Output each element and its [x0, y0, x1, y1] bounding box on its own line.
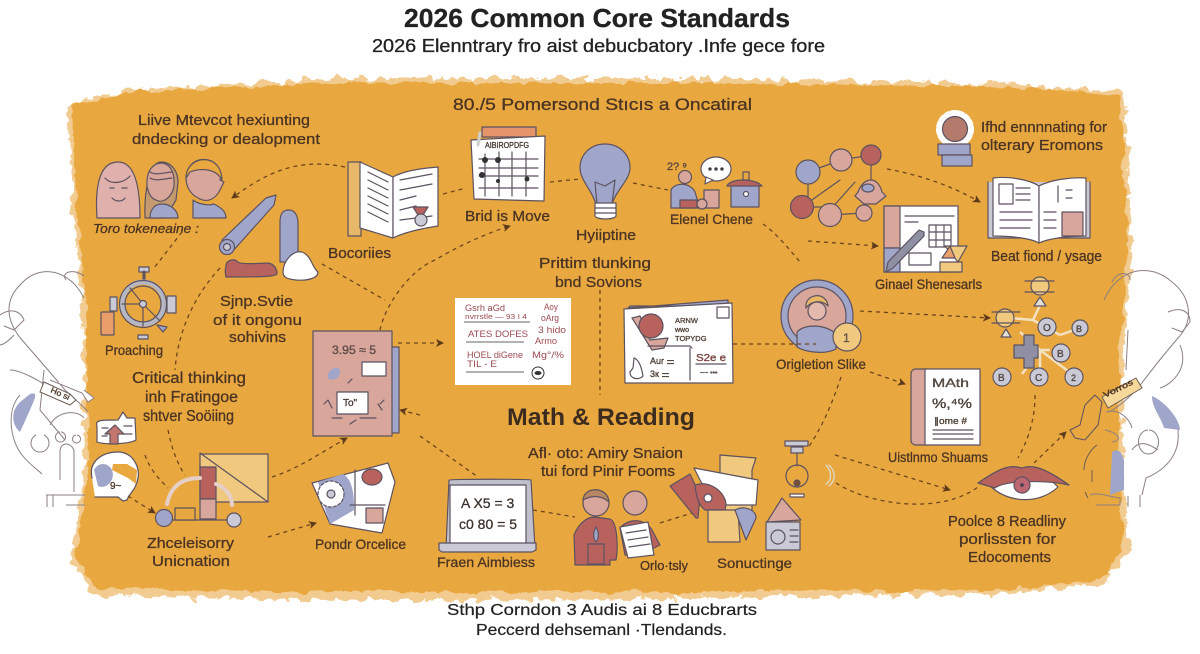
icon: open book right — [988, 177, 1090, 243]
icon: calendar — [471, 127, 545, 201]
panel: torn orange background — [68, 78, 1132, 600]
icon: math notebook — [313, 331, 399, 436]
left bust line art — [0, 272, 94, 507]
icon: laptop: c0 80 = 5 — [459, 516, 517, 532]
label: Fraen Aimbiess: Fraen Aimbiess — [437, 554, 535, 570]
panel: worksheet: Gsrh aGd — [465, 303, 505, 313]
title: 2026 Common Core Standards — [404, 3, 790, 33]
panel: card with coin: TOPYDG — [675, 334, 707, 343]
chart: tree network: 2 — [1071, 373, 1076, 383]
label: Hyiiptine: Hyiiptine — [576, 227, 636, 244]
heading: people — [132, 112, 321, 148]
panel: worksheet: Aoy — [544, 302, 558, 312]
icon: portrait — [781, 280, 861, 352]
icon: math notebook: To" — [343, 398, 358, 409]
icon: gear head and books — [938, 112, 972, 166]
panel: worksheet: Mg°/% — [532, 350, 564, 360]
label: Simple Style: of it ongonu — [213, 312, 302, 329]
label: Orlo-tsly: Orlo·tsly — [640, 559, 689, 573]
label: Critical thinking: Critical thinking — [132, 370, 246, 387]
label: Brid is Move: Brid is Move — [465, 208, 550, 225]
label: Poolce Reading: porlissten for — [959, 531, 1056, 548]
label: Critical thinking — [132, 370, 246, 425]
label: Zhceleisorry — [147, 535, 235, 570]
icon: portrait: 1 — [843, 331, 850, 345]
icon: two people reading — [574, 490, 660, 565]
icon: math book: MAth — [932, 376, 969, 390]
scroll and ribbons at right: Vorros — [1101, 377, 1135, 400]
label: Pondr Orcelice: Pondr Orcelice — [315, 536, 406, 552]
label: Uistlnmo Shuams: Uistlnmo Shuams — [888, 450, 988, 465]
panel: worksheet: 3 hido — [538, 325, 566, 335]
icon: math notebook: 3.95 ≈ 5 — [332, 343, 376, 357]
label: Simple Style — [213, 293, 302, 346]
icon: math book — [911, 369, 980, 445]
label: Zhceleisorry: Zhceleisorry — [147, 535, 235, 552]
dashed arrows — [128, 164, 1066, 537]
chart: tree network: B — [1057, 349, 1064, 360]
icon: eye — [978, 467, 1069, 500]
label: Toro: Toro tokeneaine : — [93, 221, 199, 236]
panel: card with coin: 3к ⚌ — [650, 369, 670, 379]
label: Critical thinking: shtver Soöiing — [143, 408, 234, 425]
panel: card with coin: ARNW — [675, 316, 699, 325]
footer note: Sthp Corndon 3 Audis ai 8 Educbrarts — [447, 602, 757, 619]
footer note: Peccerd dehsemanl ·Tlendands. — [476, 622, 727, 639]
label: Affordable: Afl· oto: Amiry Snaion — [528, 445, 683, 462]
chart: tree network: O — [1043, 323, 1051, 334]
panel: card with coin: ~~ ••• — [700, 370, 718, 377]
icon: worksheet with arrow — [97, 412, 136, 444]
icon: paper collage — [670, 455, 801, 550]
icon: calendar: AIBIROPDFG — [485, 141, 529, 150]
icon: three faces — [96, 160, 226, 218]
label: Zhceleisorry: Unicnation — [152, 553, 230, 570]
panel: worksheet: nvrrstle — 93 I 4 — [465, 314, 527, 321]
label: Sonuctinge: Sonuctinge — [717, 555, 792, 571]
icon: gauge — [101, 267, 176, 339]
heading: top centre: 80./5 Pomersond Stıcıs a Oncatiral — [453, 95, 752, 114]
label: Elenel Chene: Elenel Chene — [670, 211, 753, 227]
icon: pencil and robot arm — [220, 195, 318, 280]
icon: document and pencil — [884, 206, 967, 272]
icon: light bulb — [580, 144, 630, 219]
icon: hanging lamp — [785, 441, 834, 497]
panel: card with coin — [624, 300, 733, 383]
panel: worksheet — [455, 298, 571, 385]
panel: worksheet: TIL - E — [467, 359, 497, 369]
heading: people: Liive Mtevcot hexiunting — [138, 112, 310, 129]
footer note — [447, 602, 757, 639]
heading: people: dndecking or dealopment — [132, 131, 321, 148]
icon: small text scroll left — [40, 382, 76, 405]
label: Affordable — [528, 445, 683, 480]
icon: laptop: A X5 = 3 — [461, 495, 515, 511]
panel: worksheet: ATES DOFES — [468, 329, 528, 339]
label: Ginael Shenesarls: Ginael Shenesarls — [875, 276, 982, 292]
label: Prittim thinking — [539, 255, 651, 291]
icon: math book: ∥ome # — [934, 416, 967, 426]
chart: tree network: B — [1076, 324, 1082, 334]
subtitle: 2026 Elenntrary fro aist debucbatory .Infe gece fore — [372, 36, 825, 56]
label: Poolce Reading: Poolce 8 Readliny — [948, 513, 1066, 530]
chart: tree network — [992, 277, 1088, 386]
icon: puzzle head — [312, 463, 395, 533]
label: Prittim thinking: bnd Sovions — [555, 274, 642, 291]
label: Simple Style: Sjnp.Svtie — [220, 293, 293, 310]
panel: card with coin: Aur ⚌ — [650, 356, 675, 366]
panel: worksheet: HOEL diGene — [467, 350, 523, 360]
right bust line art — [1090, 270, 1190, 507]
label: Beat fiond: Beat fiond / ysage — [991, 249, 1102, 265]
icon: open book left — [348, 162, 438, 238]
panel: worksheet: oArg — [541, 313, 559, 323]
panel: top-left people — [93, 112, 321, 236]
label: Poolce Reading — [948, 513, 1066, 566]
label: Indemnating — [981, 119, 1107, 154]
icon: brain head — [91, 452, 138, 501]
label: Indemnating: Ifhd ennnnating for — [981, 119, 1107, 136]
icon: person with speech bubble: 2? ⁹ — [667, 161, 687, 173]
panel: card with coin: wwo — [674, 327, 689, 334]
icon: person with speech bubble — [667, 157, 762, 209]
label: Affordable: tui ford Pinir Fooms — [541, 463, 675, 480]
label: Proaching: Proaching — [105, 342, 163, 358]
icon: brain head: 9~ — [110, 481, 122, 492]
label: Critical thinking: inh Fratingoe — [145, 389, 238, 406]
icon: small text scroll left: Ho si — [49, 386, 71, 402]
label: Origletion Slike: Origletion Slike — [776, 356, 866, 372]
panel: worksheet: Armo — [535, 336, 557, 346]
label: Poolce Reading: Edocoments — [968, 549, 1051, 566]
label: Bocoriies: Bocoriies — [328, 245, 391, 262]
scroll and ribbons at right — [1070, 377, 1142, 498]
chart: tree network: B — [998, 373, 1005, 384]
icon: network of circles — [790, 145, 886, 226]
panel: card with coin: S2e e — [696, 353, 726, 364]
icon: math book: %,⁴% — [932, 395, 972, 411]
label: Simple Style: sohivins — [229, 329, 286, 346]
label: Prittim thinking: Prittim tlunking — [539, 255, 651, 272]
icon: laptop — [439, 479, 536, 552]
chart: tree network: C — [1035, 373, 1042, 384]
icon: compass and folder — [156, 453, 268, 527]
label: Indemnating: olterary Eromons — [981, 137, 1103, 154]
heading: Math and Reading: Math & Reading — [507, 404, 695, 431]
